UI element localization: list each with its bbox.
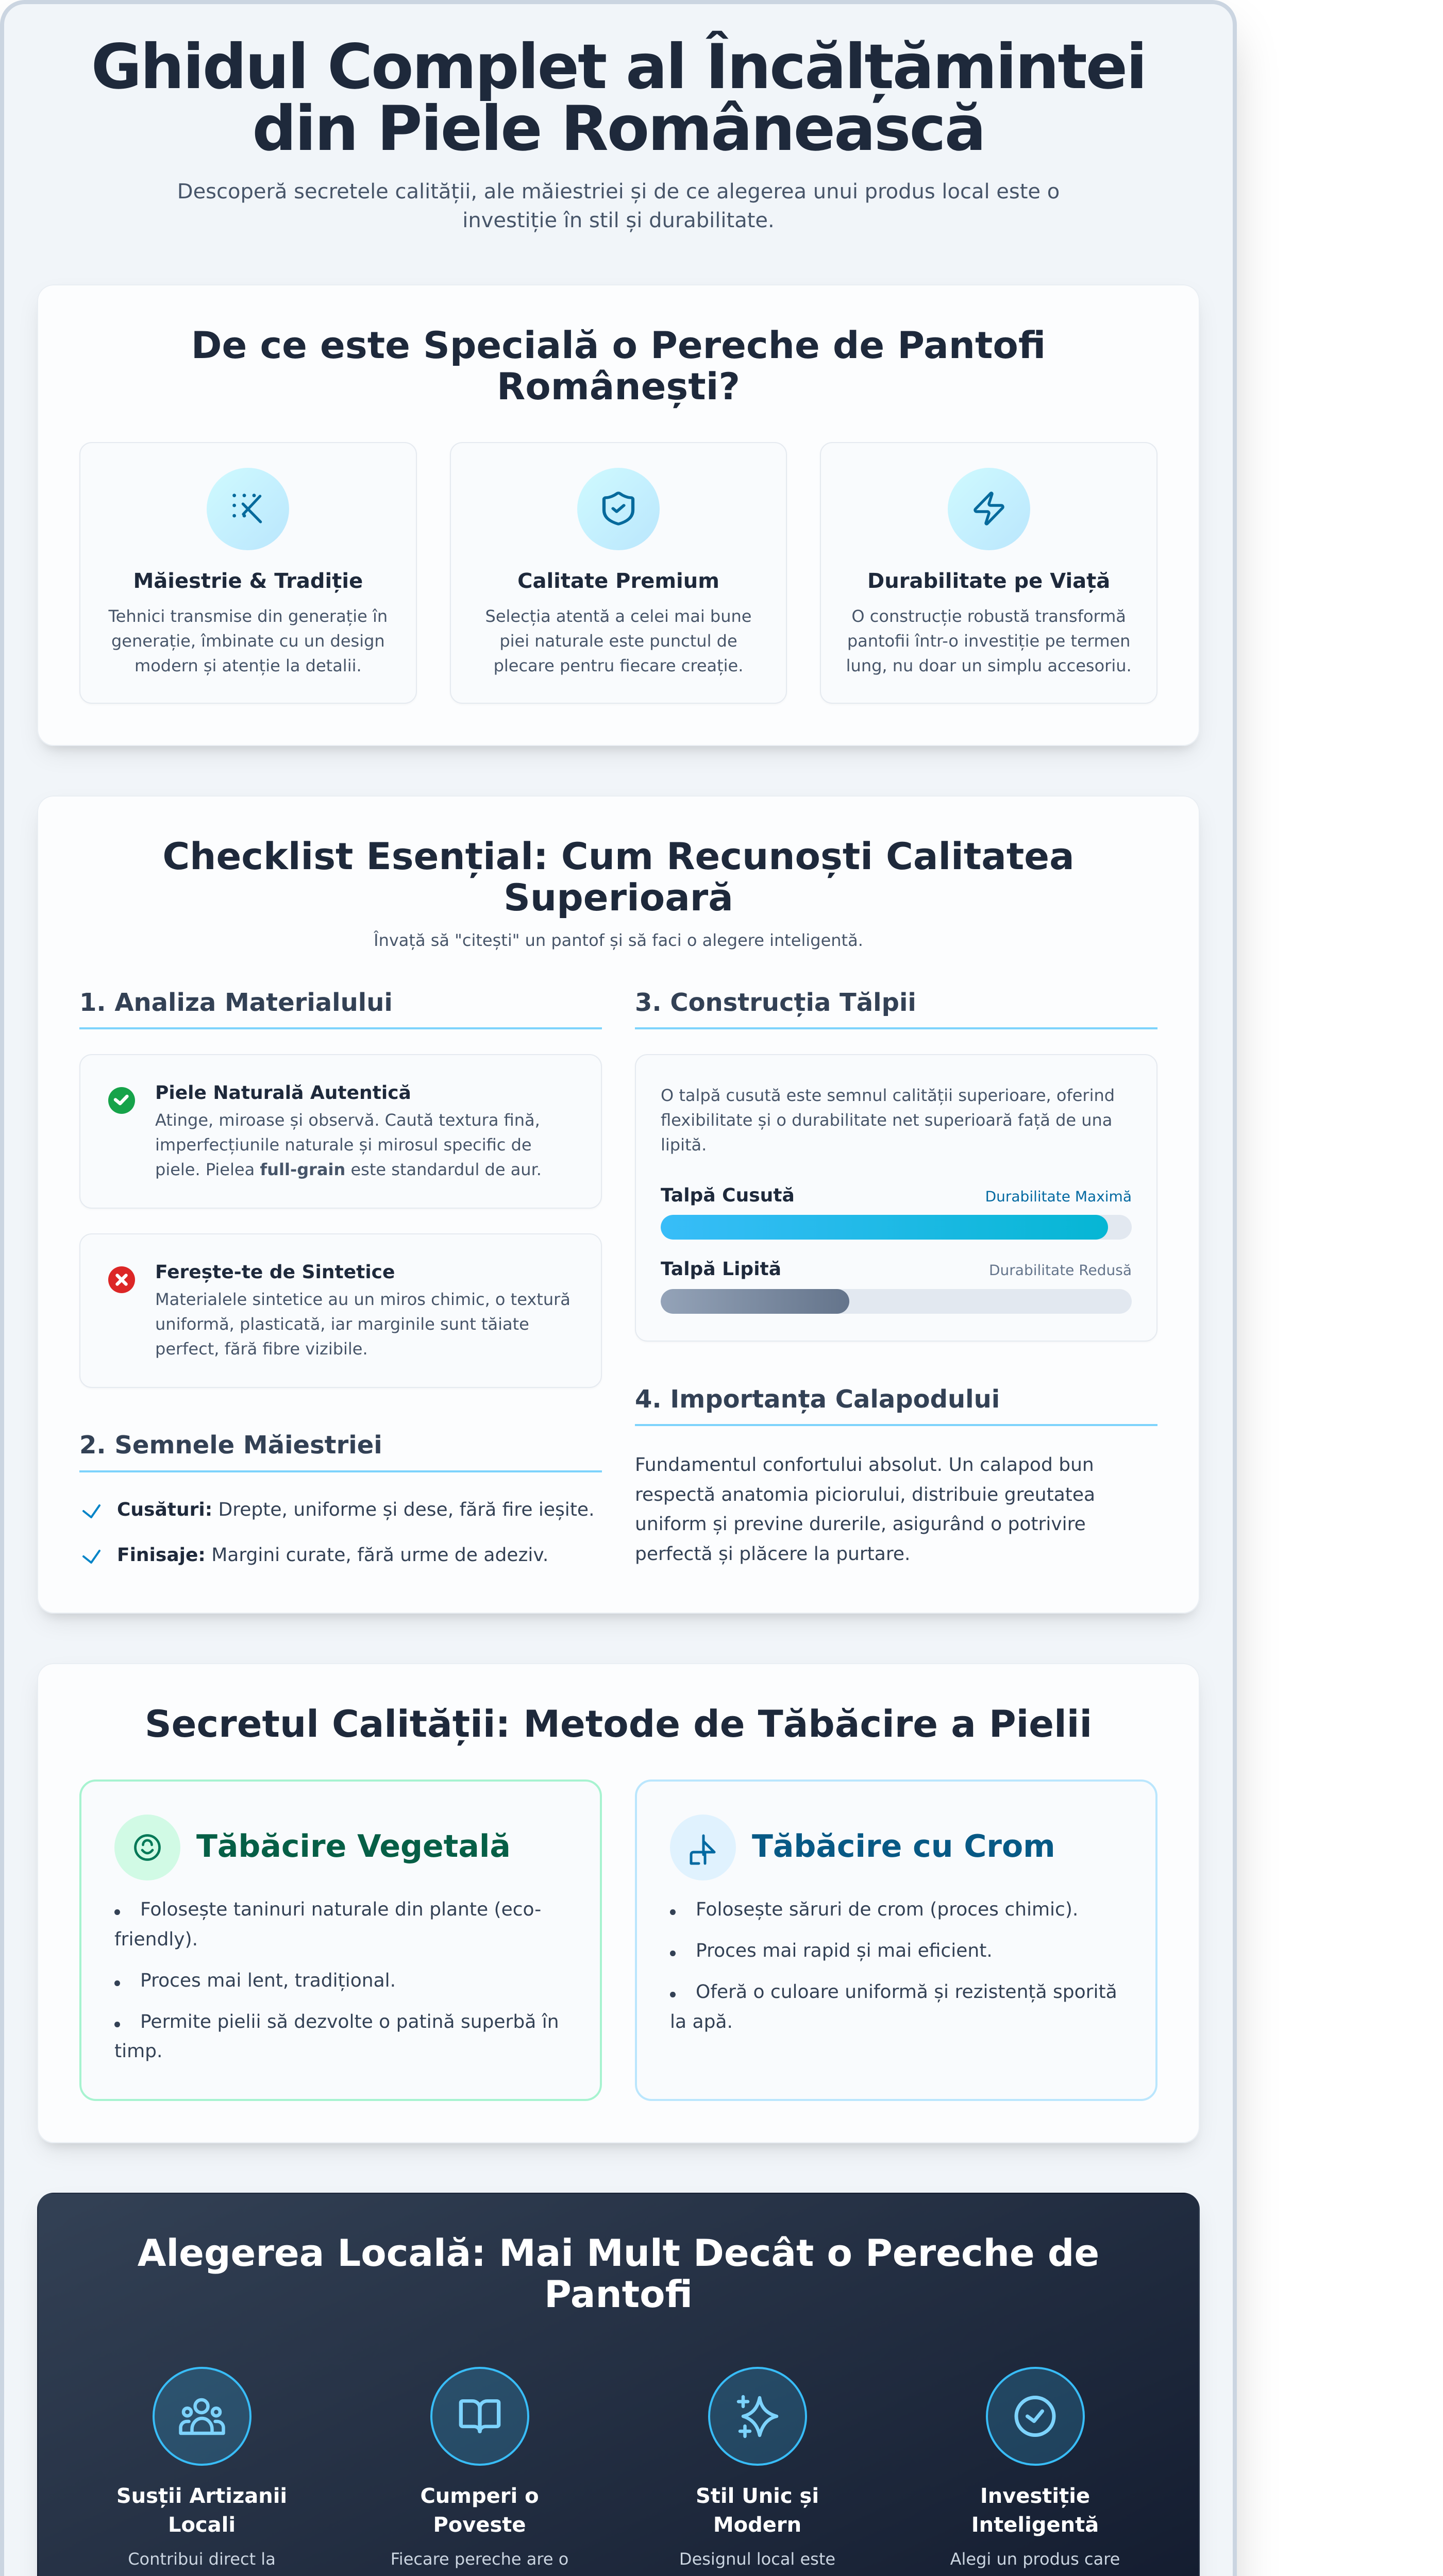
column title xyxy=(913,2482,1157,2539)
column text: Designul local este xyxy=(679,2549,835,2569)
heading: local choice: Alegerea Locală: Mai Mult Decât o Pereche de xyxy=(138,2231,1099,2275)
column title: Stil Unic și xyxy=(696,2484,819,2508)
heading: checklist: Checklist Esențial: Cum Recunoști Calitatea xyxy=(162,835,1075,878)
panel: why special xyxy=(37,284,1200,746)
heading: checklist xyxy=(162,835,1075,919)
column text xyxy=(357,2547,602,2576)
section heading 4: 4. Importanța Calapodului xyxy=(635,1385,1000,1414)
section heading 3: 3. Construcția Tălpii xyxy=(635,988,916,1017)
heading: why special: De ce este Specială o Pereche de Pantofi xyxy=(191,324,1046,367)
card title: Tăbăcire Vegetală xyxy=(196,1828,511,1865)
column title: Susții Artizanii xyxy=(116,2484,287,2508)
box text: Materialele sintetice au un miros chimic, o textură xyxy=(155,1290,571,1309)
icon: check xyxy=(82,1550,101,1564)
column text: Alegi un produs care xyxy=(950,2549,1120,2569)
section heading 1: 1. Analiza Materialului xyxy=(79,988,393,1017)
column text xyxy=(913,2547,1157,2576)
bullet 3: la apă. xyxy=(670,2011,733,2032)
card description: Tehnici transmise din generație în xyxy=(109,606,388,626)
column title: Cumperi o xyxy=(420,2484,539,2508)
panel: tanning methods xyxy=(37,1663,1200,2143)
icon: chemistry xyxy=(670,1815,736,1880)
icon: red cross xyxy=(108,1266,135,1293)
bullet 1 xyxy=(670,1895,1122,1925)
heading: checklist: Superioară xyxy=(504,876,733,919)
main title xyxy=(91,31,1146,165)
item text: Cusături: Drepte, uniforme și dese, fără fire ieșite. xyxy=(117,1499,595,1520)
icon: shield check xyxy=(577,468,660,550)
heading: tanning: Secretul Calității: Metode de Tăbăcire a Pielii xyxy=(145,1702,1092,1745)
bullet 1: Folosește taninuri naturale din plante (eco- xyxy=(140,1899,541,1920)
column title: Locali xyxy=(168,2513,236,2537)
feature card: craftsmanship xyxy=(79,442,417,704)
panel: checklist xyxy=(37,795,1200,1614)
bar label: stitched: Talpă Cusută xyxy=(661,1185,795,1206)
box text xyxy=(155,1110,542,1179)
paragraph: last: perfectă și plăcere la purtare. xyxy=(635,1544,910,1565)
card description: piei naturale este punctul de xyxy=(499,631,737,651)
bar value: stitched: Durabilitate Maximă xyxy=(985,1188,1132,1205)
card title: Tăbăcire cu Crom xyxy=(752,1828,1055,1865)
bullet 2 xyxy=(114,1966,567,1995)
checklist intro: Învață să "citești" un pantof și să faci o alegere inteligentă. xyxy=(374,930,863,950)
feature card: durability xyxy=(820,442,1157,704)
panel: local choice xyxy=(37,2193,1200,2576)
bullet 3: Permite pielii să dezvolte o patină superbă în xyxy=(140,2011,559,2032)
column title: Investiție xyxy=(980,2484,1090,2508)
card: vegetable tanning xyxy=(79,1780,602,2101)
card description: plecare pentru fiecare creație. xyxy=(494,656,743,675)
bullet 2: Proces mai lent, tradițional. xyxy=(140,1970,396,1991)
main title: Ghidul Complet al Încălțămintei xyxy=(91,31,1146,103)
box: synthetics warning xyxy=(79,1233,602,1388)
card description: pantofii într-o investiție pe termen xyxy=(847,631,1130,651)
card description xyxy=(846,606,1132,675)
column text: Contribui direct la xyxy=(128,2549,276,2569)
paragraph: last: uniform și previne durerile, asigurând o potrivire xyxy=(635,1514,1086,1535)
card title: Durabilitate pe Viață xyxy=(867,569,1110,593)
subtitle xyxy=(177,180,1060,232)
card title: Calitate Premium xyxy=(517,569,719,593)
paragraph: last: respectă anatomia piciorului, distribuie greutatea xyxy=(635,1484,1095,1505)
card description: lung, nu doar un simplu accesoriu. xyxy=(846,656,1132,675)
bullet 3 xyxy=(114,2007,567,2066)
column title: Poveste xyxy=(433,2513,526,2537)
chart intro: flexibilitate și o durabilitate net superioară față de una xyxy=(661,1110,1112,1130)
icon: smile xyxy=(114,1815,180,1880)
box text: Atinge, miroase și observă. Caută textura fină, xyxy=(155,1110,540,1130)
heading: local choice: Pantofi xyxy=(544,2273,693,2316)
card description: generație, îmbinate cu un design xyxy=(111,631,385,651)
card: chrome tanning xyxy=(635,1780,1157,2101)
bar: glued sole xyxy=(661,1289,1132,1314)
feature card: quality xyxy=(450,442,787,704)
bullet 1: Folosește săruri de crom (proces chimic). xyxy=(696,1899,1078,1920)
chart intro: O talpă cusută este semnul calității superioare, oferind xyxy=(661,1086,1115,1105)
subtitle: Descoperă secretele calității, ale măiestriei și de ce alegerea unui produs local este o xyxy=(177,180,1060,204)
box title: Ferește-te de Sintetice xyxy=(155,1262,395,1283)
column title xyxy=(79,2482,324,2539)
column title: Inteligentă xyxy=(971,2513,1099,2537)
main title: din Piele Românească xyxy=(252,93,985,165)
column: investment xyxy=(913,2367,1157,2576)
icon: check xyxy=(82,1504,101,1519)
bullet 3: timp. xyxy=(114,2041,162,2062)
heading: local choice xyxy=(38,2232,1199,2315)
heading: why special xyxy=(191,324,1046,408)
icon: lightning xyxy=(948,468,1030,550)
column title xyxy=(357,2482,602,2539)
bar label: glued: Talpă Lipită xyxy=(661,1259,781,1280)
box text: piele. Pielea full-grain este standardul de aur. xyxy=(155,1160,542,1179)
column: story xyxy=(357,2367,602,2576)
box title: Piele Naturală Autentică xyxy=(155,1082,411,1104)
list item: finishes xyxy=(82,1545,548,1566)
box text xyxy=(155,1290,571,1359)
card description: O construcție robustă transformă xyxy=(851,606,1126,626)
heading: why special: Românești? xyxy=(497,365,740,408)
icon: open book xyxy=(430,2367,529,2466)
paragraph: last: Fundamentul confortului absolut. Un calapod bun xyxy=(635,1454,1094,1476)
paragraph: last xyxy=(635,1454,1095,1565)
chart intro: lipită. xyxy=(661,1135,707,1155)
column title: Modern xyxy=(713,2513,801,2537)
box: sole durability chart xyxy=(635,1054,1157,1342)
column text xyxy=(79,2547,324,2576)
icon: sparkles xyxy=(708,2367,807,2466)
card description xyxy=(108,606,388,675)
subtitle: investiție în stil și durabilitate. xyxy=(462,209,775,232)
bar value: glued: Durabilitate Redusă xyxy=(989,1262,1132,1279)
column: style xyxy=(635,2367,880,2576)
card description: Selecția atentă a celei mai bune xyxy=(485,606,751,626)
column title xyxy=(635,2482,880,2539)
card description xyxy=(485,606,751,675)
chart intro xyxy=(661,1086,1115,1155)
icon: check circle xyxy=(985,2367,1084,2466)
icon: people xyxy=(153,2367,251,2466)
item text: Finisaje: Margini curate, fără urme de adeziv. xyxy=(117,1545,548,1566)
box text: uniformă, plasticată, iar marginile sunt tăiate xyxy=(155,1314,529,1334)
bar: stitched sole xyxy=(661,1215,1132,1240)
box text: perfect, fără fibre vizibile. xyxy=(155,1339,368,1359)
card title: Măiestrie & Tradiție xyxy=(133,569,363,593)
bullet 1: friendly). xyxy=(114,1929,198,1950)
bullet 2 xyxy=(670,1936,1122,1966)
bullet 3: Oferă o culoare uniformă și rezistență sporită xyxy=(696,1981,1117,2003)
column text: Fiecare pereche are o xyxy=(391,2549,568,2569)
icon: green check xyxy=(108,1087,135,1114)
list item: stitching xyxy=(82,1499,595,1520)
column: artisans xyxy=(79,2367,324,2576)
box: authentic leather xyxy=(79,1054,602,1209)
icon: scissors xyxy=(207,468,289,550)
bullet 2: Proces mai rapid și mai eficient. xyxy=(696,1940,993,1961)
box text: imperfecțiunile naturale și mirosul specific de xyxy=(155,1135,532,1155)
column text xyxy=(635,2547,880,2576)
bullet 1 xyxy=(114,1895,567,1954)
card description: modern și atenție la detalii. xyxy=(135,656,362,675)
section heading 2: 2. Semnele Măiestriei xyxy=(79,1431,382,1460)
bullet 3 xyxy=(670,1977,1122,2037)
